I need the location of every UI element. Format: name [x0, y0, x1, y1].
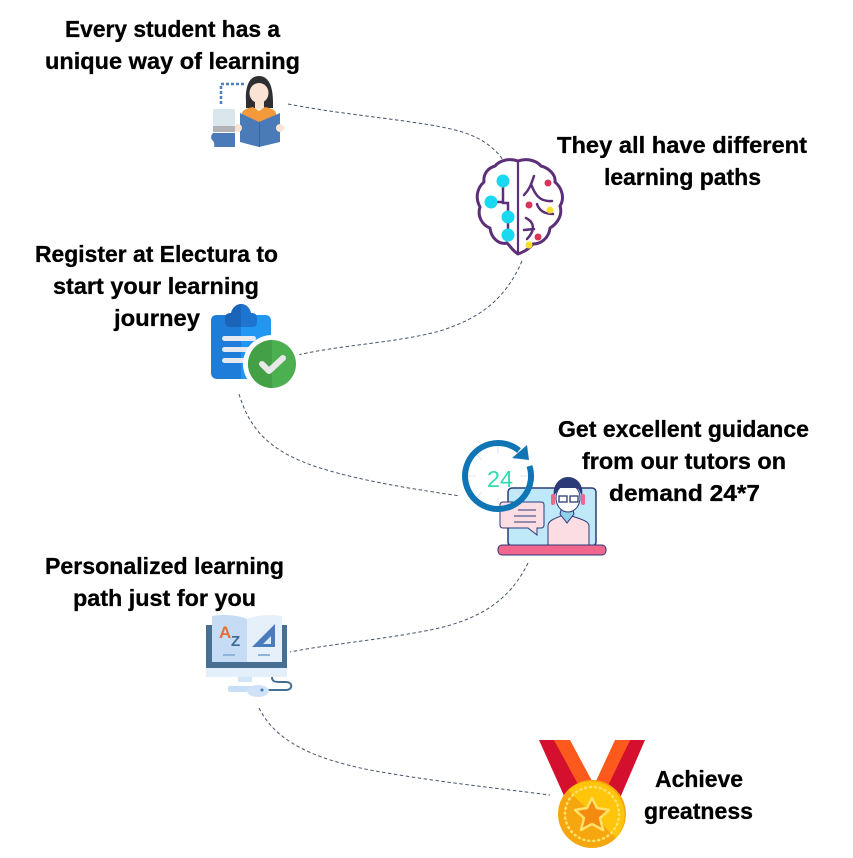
heading: learning paths	[557, 132, 807, 190]
heading: personalized: path just for you	[73, 585, 256, 611]
heading: register: start your learning	[53, 273, 259, 299]
heading: guidance	[558, 416, 809, 506]
heading: guidance: Get excellent guidance	[558, 416, 809, 442]
heading: register: Register at Electura to	[35, 241, 278, 267]
heading: learning paths: learning paths	[604, 164, 761, 190]
connector: brain to clipboard	[298, 261, 522, 355]
heading: personalized: Personalized learning	[45, 553, 284, 579]
heading: guidance: demand 24*7	[609, 480, 760, 506]
heading: register	[35, 241, 278, 331]
icon: student reading	[211, 76, 284, 147]
heading: every student: unique way of learning	[45, 48, 300, 74]
heading: achieve greatness: greatness	[644, 798, 753, 824]
icon: brain	[477, 160, 562, 254]
icon: tutor on laptop with 24h clock	[465, 443, 606, 555]
icon: monitor with open book	[206, 615, 291, 697]
icon: clipboard with check	[211, 304, 301, 393]
connector: student to brain	[288, 104, 503, 160]
heading: achieve greatness	[644, 766, 753, 824]
connector: book to medal	[259, 708, 550, 795]
heading: register: journey	[113, 305, 200, 331]
icon: tutor on laptop with 24h clock: 24	[487, 466, 513, 492]
icon: monitor with open book: Z	[231, 633, 240, 650]
heading: every student: Every student has a	[65, 16, 280, 42]
heading: achieve greatness: Achieve	[655, 766, 743, 792]
heading: personalized	[45, 553, 284, 611]
icon: monitor with open book: A	[219, 623, 231, 642]
heading: every student	[45, 16, 300, 74]
icon: gold medal	[539, 740, 645, 848]
connector: tutor to book	[290, 563, 528, 652]
heading: guidance: from our tutors on	[582, 448, 786, 474]
heading: learning paths: They all have different	[557, 132, 807, 158]
connector: clipboard to tutor	[239, 394, 460, 496]
